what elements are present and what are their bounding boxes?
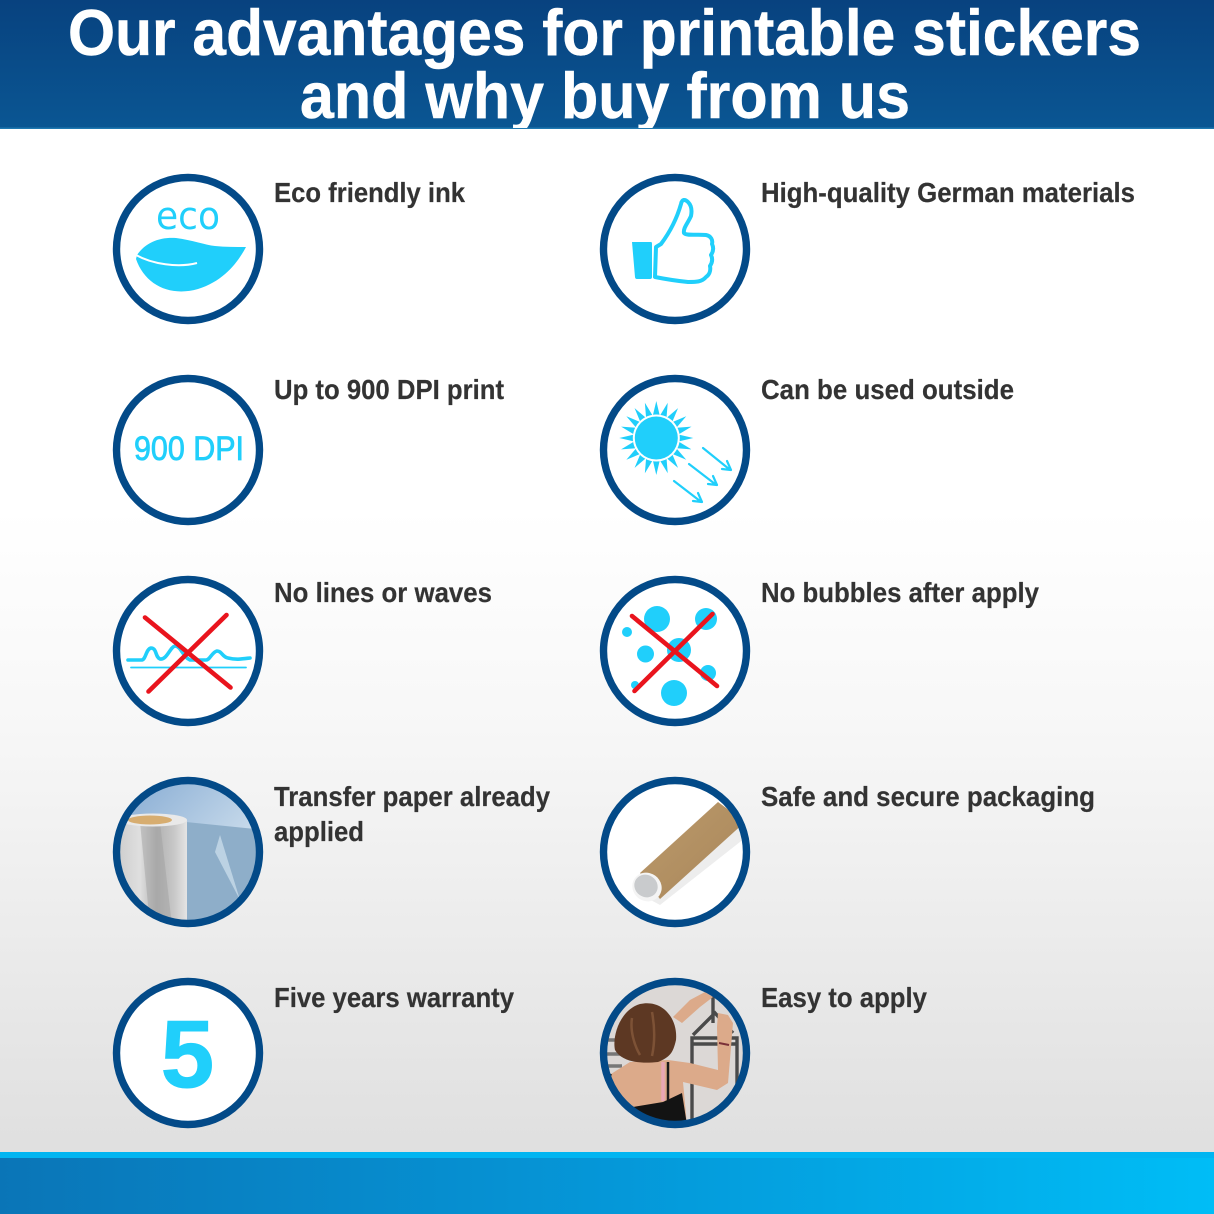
icon: sun and arrows xyxy=(604,378,746,522)
label: 900 DPI: Up to 900 DPI print xyxy=(274,374,504,405)
header banner xyxy=(0,0,1214,132)
label: outdoor use: Can be used outside xyxy=(761,374,1014,405)
icon: crossed-out waves xyxy=(116,580,260,722)
label: easy to apply: Easy to apply xyxy=(761,982,927,1013)
label: warranty: Five years warranty xyxy=(274,982,514,1013)
icon: crossed-out bubbles xyxy=(604,580,746,722)
icon: transfer film roll photo xyxy=(110,775,266,935)
icon: 900 DPI: 900 DPI xyxy=(134,430,244,468)
icon: eco leaf: eco xyxy=(156,194,220,238)
item: no bubbles xyxy=(604,577,1039,722)
label: eco friendly ink: Eco friendly ink xyxy=(274,177,465,208)
icon: cardboard tube photo xyxy=(603,780,747,924)
item: packaging xyxy=(603,780,1095,924)
label: transfer paper: applied xyxy=(274,816,364,847)
label: packaging: Safe and secure packaging xyxy=(761,781,1095,812)
icon: number five xyxy=(116,982,260,1124)
icon: number five: 5 xyxy=(161,1001,214,1108)
item: 900 DPI xyxy=(116,374,504,522)
label: no lines or waves: No lines or waves xyxy=(274,577,492,608)
footer band xyxy=(0,1152,1214,1214)
label: no bubbles: No bubbles after apply xyxy=(761,577,1039,608)
item: easy to apply xyxy=(600,981,927,1125)
item: German materials xyxy=(604,177,1135,320)
title xyxy=(68,0,1141,132)
icon: 900 DPI xyxy=(116,378,260,522)
label: German materials: High-quality German materials xyxy=(761,177,1135,208)
title: and why buy from us xyxy=(300,59,910,132)
label: transfer paper: Transfer paper already xyxy=(274,781,550,812)
item: no lines or waves xyxy=(116,577,492,722)
icon: woman applying sticker photo xyxy=(600,981,747,1125)
item: eco friendly ink xyxy=(116,177,465,320)
item: warranty xyxy=(116,982,514,1124)
icon: eco leaf xyxy=(116,178,260,320)
label: transfer paper xyxy=(274,781,550,847)
icon: thumbs up xyxy=(604,178,746,320)
item: outdoor use xyxy=(604,374,1014,522)
item: transfer paper xyxy=(110,775,550,935)
